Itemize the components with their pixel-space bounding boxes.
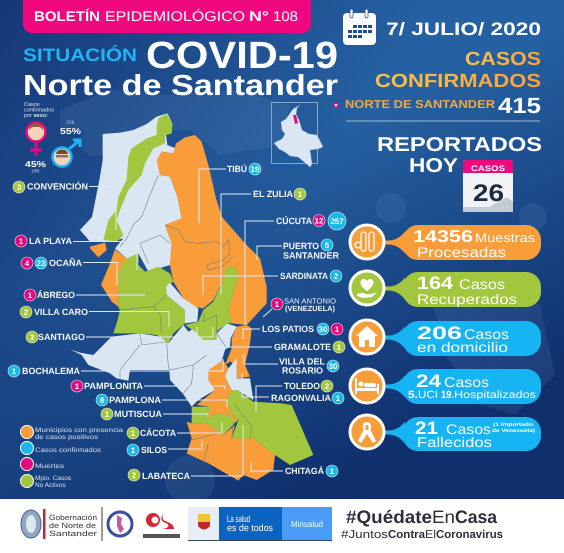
icon: hospital bed: [355, 378, 379, 394]
stat: casos fallecidos: Fallecidos: [417, 434, 492, 450]
label: Villa Caro: VILLA CARO: [34, 307, 88, 317]
label: Pamplona: [96, 394, 227, 407]
label: Villa del Rosario: 30: [329, 362, 338, 371]
header banner: boletín: 108: [273, 8, 298, 24]
hashtags: Contra: [388, 529, 426, 541]
date: 7/ JULIO/ 2020: [386, 19, 541, 39]
hashtags: En: [432, 507, 455, 527]
label: Ocaña: 4: [25, 259, 30, 268]
cases by sex: Casos: [24, 102, 40, 108]
label: Bochalema: 1: [12, 367, 17, 376]
label: Sardinata: [203, 270, 342, 295]
cases by sex: 45%: [25, 159, 47, 169]
label: Labateca: [128, 425, 243, 481]
label: Villa del Rosario: [244, 354, 339, 376]
reported today: [377, 134, 542, 212]
label: Los Patios: 1: [335, 325, 340, 334]
stat: casos recuperados: Recuperados: [417, 291, 517, 307]
logo: Minsalud: [188, 507, 332, 541]
map legend: No Activos: [35, 482, 66, 489]
map legend: [20, 426, 123, 489]
icon: ribbon: [358, 422, 376, 443]
cases by sex: 55%: [60, 126, 82, 136]
title: Norte de Santander: [23, 70, 338, 102]
label: Gramalote: [197, 327, 345, 353]
reported today: 26: [473, 180, 504, 207]
hashtags: El: [425, 529, 436, 541]
stat: casos fallecidos: de Venezuela): [492, 428, 535, 434]
label: San Antonio (Venezuela): 1: [275, 300, 280, 309]
stat: casos fallecidos: (1 Importado: [493, 422, 533, 428]
label: Santiago: [26, 327, 213, 343]
stat: casos recuperados: [350, 271, 541, 307]
label: Cúcuta: CÚCUTA: [276, 216, 312, 226]
label: Silos: SILOS: [141, 445, 167, 455]
confirmed cases: [334, 49, 541, 122]
header banner: boletín: [23, 0, 311, 33]
label: Silos: 1: [131, 446, 136, 455]
header banner: boletín: BOLETÍN: [34, 8, 100, 24]
cases by sex: 186: [31, 168, 40, 174]
label: Villa del Rosario: ROSARIO: [282, 366, 323, 376]
label: La Playa: LA PLAYA: [29, 236, 72, 246]
stat: casos hospitalizados: [350, 369, 541, 404]
logo: IDS: [143, 512, 180, 538]
label: San Antonio (Venezuela): SAN ANTONIO: [284, 296, 336, 306]
label: Santiago: SANTIAGO: [38, 332, 85, 342]
stat: casos hospitalizados: 24: [416, 371, 441, 391]
hashtags: #Quédate: [346, 507, 432, 527]
cases by sex: [24, 102, 82, 174]
label: Los Patios: LOS PATIOS: [262, 324, 314, 334]
stat: muestras procesadas: Procesadas: [417, 244, 506, 260]
hashtags: [341, 507, 503, 541]
label: Sardinata: 2: [334, 272, 339, 281]
label: Toledo: 2: [325, 382, 330, 391]
label: Ábrego: [24, 289, 145, 301]
reported today: REPORTADOS: [377, 134, 542, 156]
logo: Gobernación de Norte de Santander: Gobernación: [49, 513, 97, 522]
label: Villa Caro: [20, 306, 169, 327]
label: Cácota: [127, 422, 222, 439]
stat: casos hospitalizados: 5.: [408, 389, 418, 401]
label: Gramalote: GRAMALOTE: [274, 342, 331, 352]
label: Chitagá: 1: [330, 467, 335, 476]
label: El Zulia: 1: [298, 190, 303, 199]
label: La Playa: 1: [19, 237, 24, 246]
label: Pamplonita: 1: [75, 382, 80, 391]
map legend: Casos confirmados: [35, 447, 102, 454]
map legend: de casos positivos: [35, 434, 99, 441]
title: SITUACIÓN: [23, 45, 137, 65]
label: Mutiscua: MUTISCUA: [114, 409, 163, 419]
label: Labateca: 2: [132, 471, 137, 480]
label: Villa del Rosario: VILLA DEL: [279, 356, 325, 366]
label: Puerto Santander: 5: [325, 241, 330, 250]
hashtags: #Juntos: [341, 529, 388, 541]
label: Bochalema: [8, 359, 223, 377]
label: Santiago: 3: [30, 333, 35, 342]
stat: muestras procesadas: [350, 225, 541, 260]
stat: casos hospitalizados: Casos: [444, 374, 489, 390]
label: Puerto Santander: [257, 239, 339, 260]
map: Norte de Santander municipalities: [70, 113, 313, 481]
label: Sardinata: SARDINATA: [280, 271, 328, 281]
logo: circular seal: [108, 512, 132, 536]
label: El Zulia: EL ZULIA: [253, 189, 293, 199]
title: [23, 35, 338, 102]
stat: casos en domicilio: Casos: [464, 326, 509, 342]
label: Ábrego: 1: [28, 291, 33, 300]
label: Cúcuta: 12: [315, 216, 324, 226]
label: Los Patios: 30: [319, 325, 328, 334]
label: Bochalema: BOCHALEMA: [22, 366, 80, 376]
icon: heart in hand: [357, 279, 377, 298]
label: San Antonio (Venezuela): (VENEZUELA): [285, 304, 335, 313]
label: Ragonvalia: 1: [336, 394, 341, 403]
label: Cácota: CÁCOTA: [140, 428, 176, 438]
stat: casos en domicilio: en domicilio: [417, 339, 508, 355]
label: Pamplona: PAMPLONA: [109, 395, 161, 405]
label: Convención: CONVENCIÓN: [27, 182, 88, 192]
logo: Gobernación de Norte de Santander: de Norte de: [49, 521, 96, 530]
confirmed cases: CASOS: [465, 49, 541, 70]
stat: casos fallecidos: Casos: [446, 421, 491, 437]
map legend: Municipios con presencia: [35, 427, 123, 434]
reported today: CASOS: [471, 164, 506, 173]
label: El Zulia: [221, 188, 306, 295]
stat: casos en domicilio: 206: [417, 323, 462, 343]
logo: Gobernación de Norte de Santander: [21, 507, 102, 541]
icon: house: [356, 326, 378, 347]
footer: [0, 499, 564, 553]
label: Ragonvalia: RAGONVALIA: [271, 393, 331, 403]
reported today: HOY: [409, 155, 459, 177]
label: Tibú: TIBÚ: [227, 164, 247, 174]
hashtags: Casa: [455, 507, 498, 527]
stat: casos hospitalizados: 19.: [441, 389, 454, 401]
label: Tibú: [199, 163, 261, 223]
icon: test tubes: [355, 232, 374, 251]
label: Ocaña: 23: [37, 259, 46, 268]
label: Pamplonita: [71, 380, 225, 392]
label: Toledo: [256, 380, 333, 412]
mini map: Colombia: [272, 102, 323, 167]
cases by sex: 229: [66, 120, 75, 126]
label: Gramalote: 1: [337, 343, 342, 352]
stat: casos en domicilio: [350, 320, 541, 356]
stat: casos hospitalizados: UCI: [418, 389, 438, 401]
cases by sex: confirmados: [24, 108, 54, 114]
logo: Minsalud: Minsalud: [291, 519, 323, 529]
logo: Gobernación de Norte de Santander: Santander: [49, 529, 98, 538]
logo: Minsalud: es de todos: [227, 523, 273, 534]
header banner: boletín: N°: [249, 8, 269, 24]
label: Ocaña: OCAÑA: [49, 257, 82, 268]
label: Pamplona: 8: [100, 396, 105, 405]
label: San Antonio (Venezuela): [263, 296, 336, 317]
label: Villa Caro: 2: [24, 308, 29, 317]
map legend: Muertes: [35, 463, 65, 470]
label: Puerto Santander: PUERTO: [283, 241, 319, 251]
confirmed cases: 415: [498, 93, 541, 118]
label: Cácota: 1: [131, 429, 136, 438]
label: Puerto Santander: SANTANDER: [283, 250, 339, 260]
stat: casos fallecidos: [350, 415, 541, 451]
label: Toledo: TOLEDO: [284, 381, 320, 391]
header banner: boletín: EPIDEMIOLÓGICO: [105, 8, 245, 24]
label: Cúcuta: 257: [330, 217, 344, 226]
label: Mutiscua: 1: [105, 410, 110, 419]
logo: Minsalud: La salud: [227, 514, 250, 525]
confirmed cases: NORTE DE SANTANDER: [345, 99, 496, 111]
stat: casos recuperados: Casos: [459, 276, 505, 292]
stat: muestras procesadas: 14356: [413, 227, 473, 246]
label: Silos: [127, 440, 202, 456]
stat: casos fallecidos: 21: [415, 418, 438, 438]
label: Chitagá: [251, 462, 338, 477]
stat: casos recuperados: 164: [417, 273, 453, 293]
label: Pamplonita: PAMPLONITA: [84, 381, 143, 391]
stat: muestras procesadas: Muestras: [475, 231, 535, 245]
label: Tibú: 19: [251, 165, 260, 174]
label: Convención: [13, 181, 116, 230]
label: Labateca: LABATECA: [142, 471, 190, 481]
confirmed cases: CONFIRMADOS: [375, 71, 541, 92]
stat: casos hospitalizados: Hospitalizados: [454, 389, 536, 401]
label: Convención: 3: [17, 183, 22, 192]
label: Mutiscua: [101, 408, 208, 420]
label: La Playa: [15, 235, 137, 270]
label: Los Patios: [243, 323, 343, 339]
label: Ábrego: ÁBREGO: [37, 290, 75, 300]
title: COVID-19: [146, 35, 338, 77]
label: Chitagá: CHITAGÁ: [285, 466, 324, 476]
label: Cúcuta: [245, 212, 346, 325]
hashtags: Coronavirus: [436, 529, 503, 541]
map legend: Mpio. Casos: [35, 475, 72, 482]
label: Ragonvalia: [242, 373, 344, 404]
cases by sex: por sexo:: [24, 113, 48, 119]
label: Ocaña: [21, 257, 117, 285]
icon: calendar: [343, 9, 376, 45]
